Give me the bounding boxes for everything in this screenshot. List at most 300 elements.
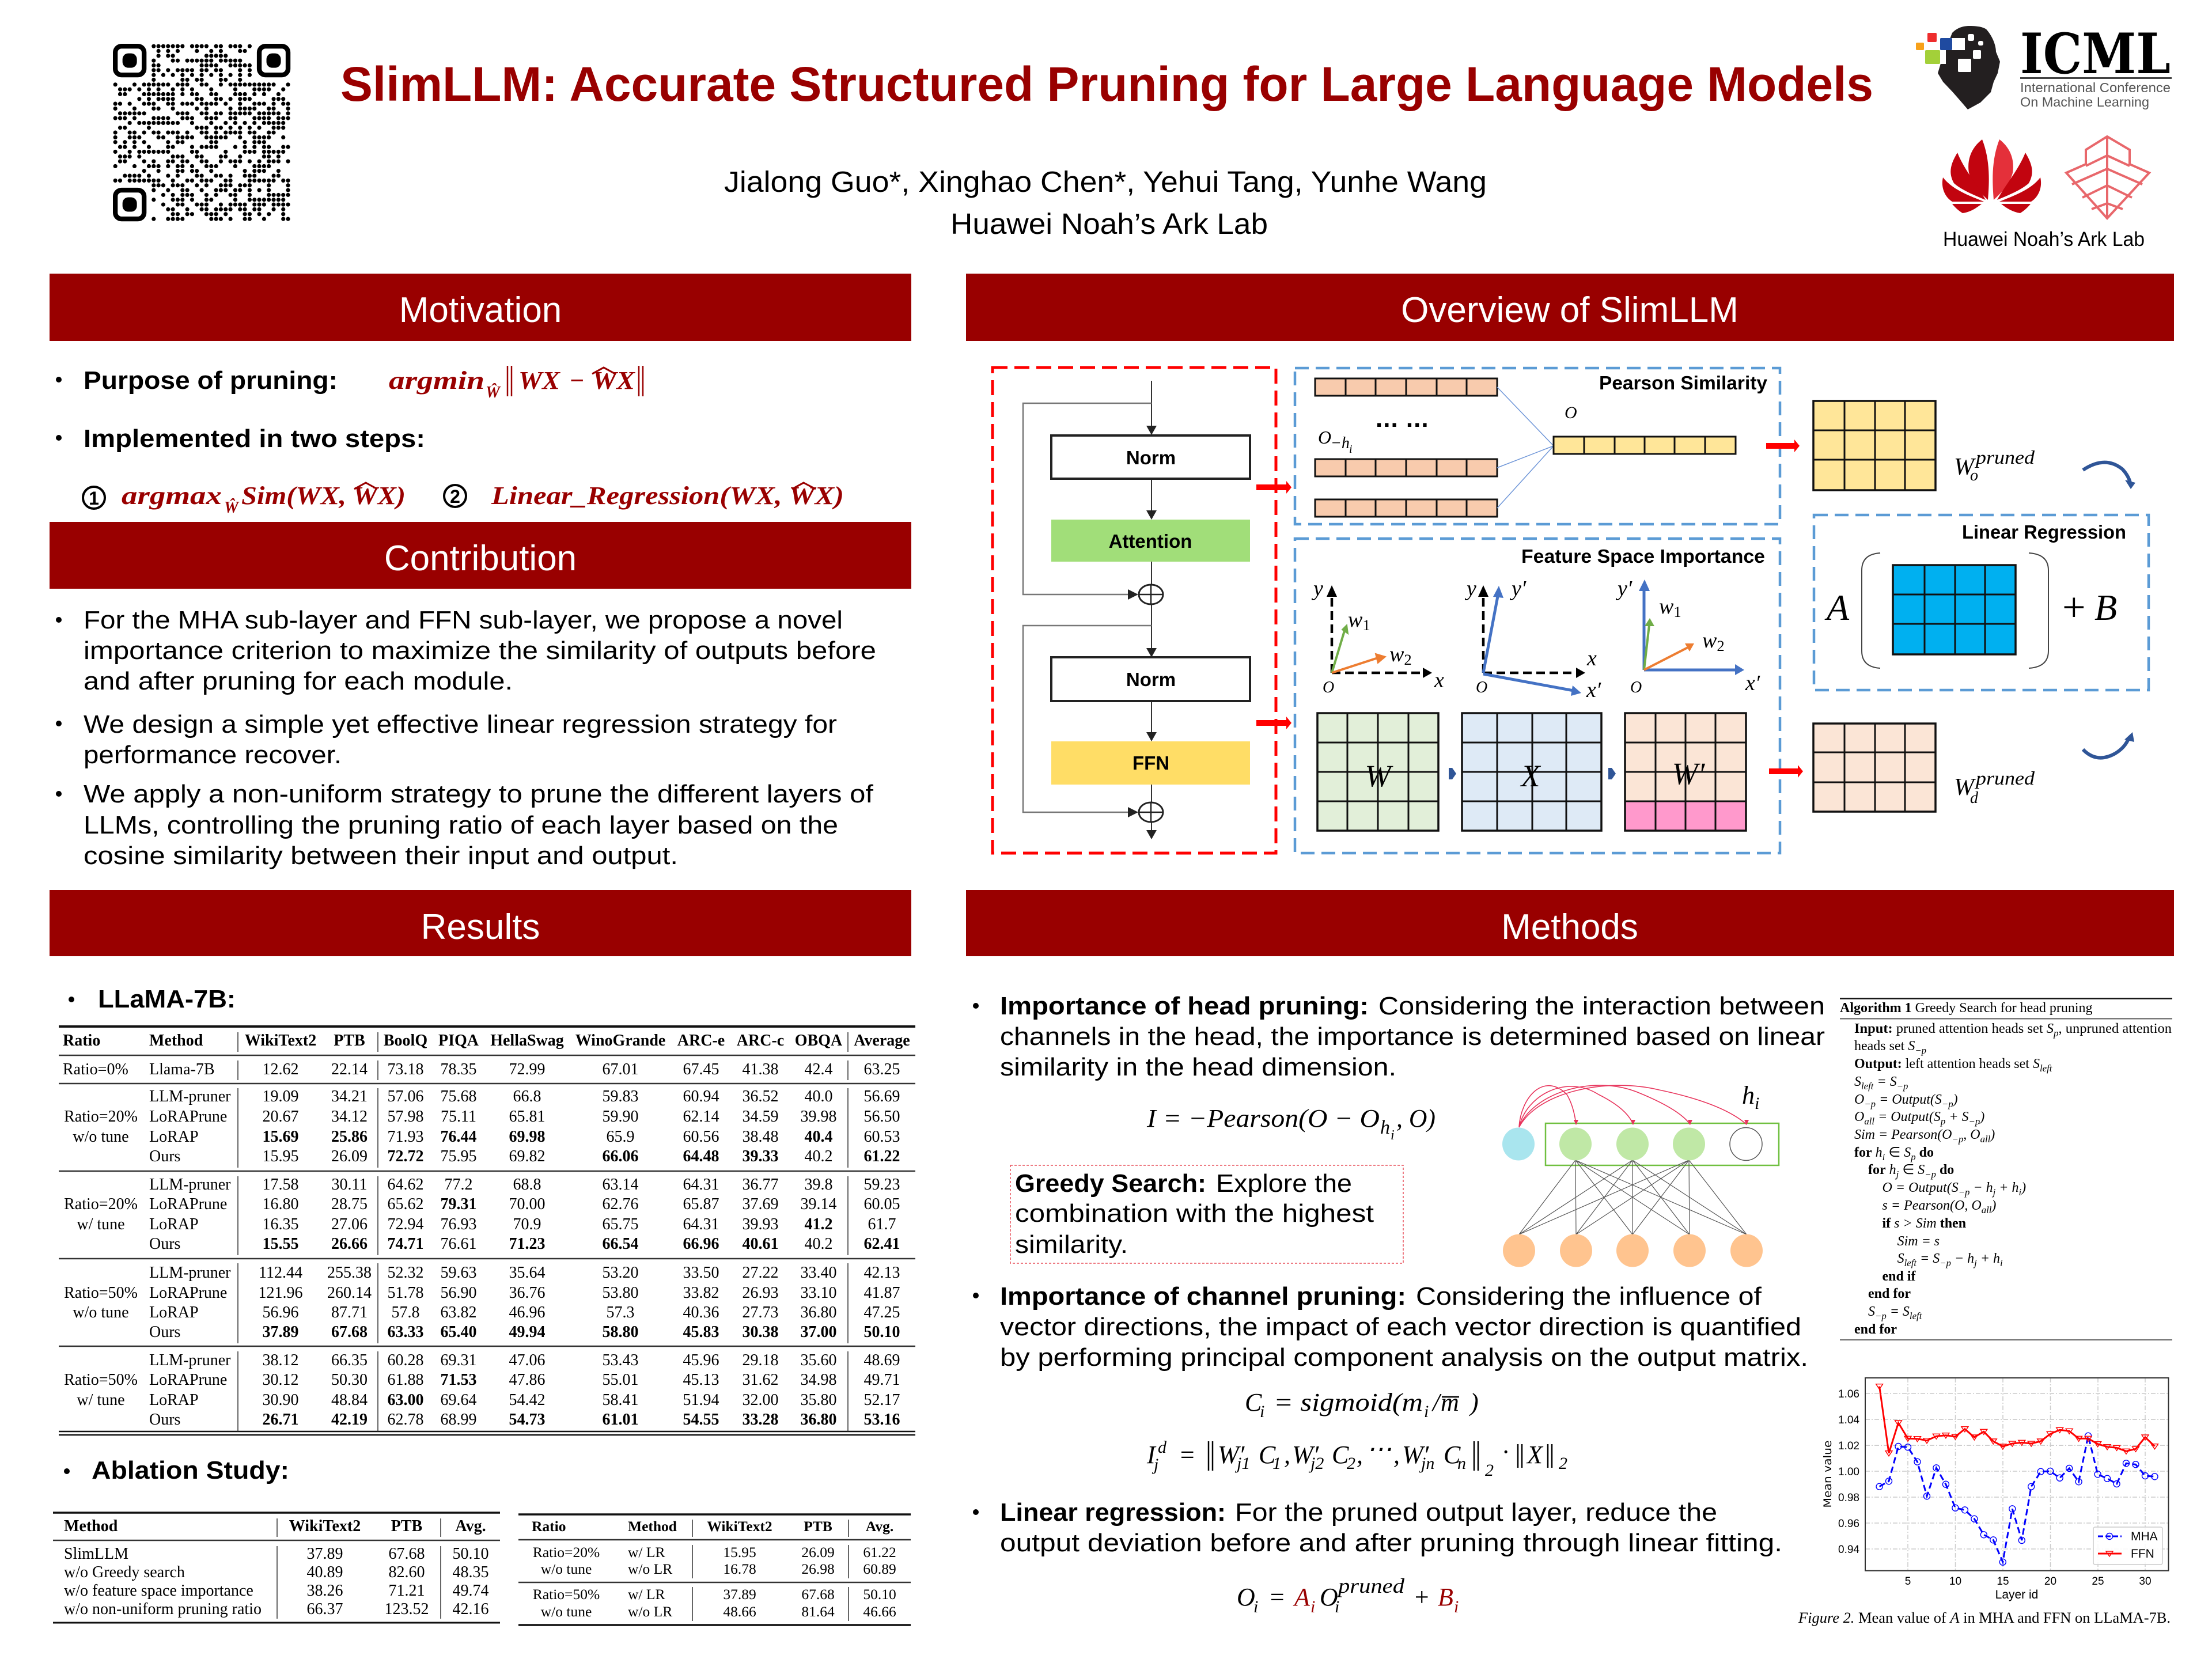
arrow: curved bottom [2083,732,2134,758]
table group: ratio 20 percent with tuning: 66.96 [683,1235,719,1253]
table group: ratio 20 percent without tuning: 59.83 [603,1088,638,1105]
formula: channel importance: d [1158,1438,1167,1457]
table: ablation of linear regression: w/o tune [541,1560,592,1577]
heading: Overview of SlimLLM [966,274,2174,341]
table group: ratio 20 percent with tuning: 27.06 [331,1215,368,1233]
table: ablation by component: w/o non-uniform pruning ratio [64,1600,262,1618]
bullet: non-uniform strategy: cosine similarity between their input and output. [84,842,678,870]
table: ablation by component: WikiText2 [289,1517,361,1535]
formula: pruning objective: argmin [389,366,484,395]
table header row: ARC-e [677,1032,725,1050]
table group: ratio 20 percent without tuning: 57.06 [387,1088,424,1105]
callout: greedy search: Greedy Search: [1015,1169,1206,1198]
algorithm: greedy search: for hj ∈ S−p do [1868,1162,1954,1180]
label: W_d pruned: pruned [1975,768,2035,789]
table: ablation of linear regression: 26.09 [801,1544,835,1560]
logo: Noah's Ark [2066,137,2149,218]
bullet: importance of head pruning [973,992,1825,1081]
panel: Pearson similarity: ... ... [1376,404,1429,433]
formula: channel importance: W′ [1292,1441,1320,1469]
table group: ratio 20 percent without tuning: 34.21 [331,1088,368,1105]
algorithm: greedy search: s = Pearson(O, Oall) [1883,1198,1996,1215]
table group: ratio 20 percent without tuning [64,1088,900,1165]
algorithm: greedy search: S−p = Sleft [1868,1304,1922,1321]
arrow: Pearson similarity to pruned output weights [1766,440,1800,452]
table group: ratio 20 percent with tuning: LLM-pruner [149,1176,231,1194]
formula: C_i sigmoid: / [1431,1388,1442,1416]
table: ablation of linear regression: w/o LR [628,1603,672,1620]
table header row: PTB [334,1032,365,1050]
table group: ratio 20 percent without tuning: 69.98 [509,1128,545,1146]
table: ablation of linear regression: 48.66 [723,1603,756,1620]
table group: ratio 20 percent without tuning: 62.14 [683,1108,719,1126]
algorithm: greedy search: end for [1854,1322,1897,1337]
formula: head importance: i [1391,1128,1395,1143]
diagram: transformer block: Norm [1126,669,1176,690]
x axis ticks: 15 [1997,1575,2009,1588]
table group: ratio 20 percent with tuning: 16.35 [263,1215,298,1233]
diagram: transformer block: FFN [1132,752,1169,774]
x axis ticks: 10 [1949,1575,1961,1588]
step 1 formula: Ŵ [224,498,240,517]
bullet: linear regression strategy: performance recover. [84,741,342,769]
y axis label: Mean value [1821,1440,1834,1508]
heading: Contribution [50,522,911,589]
matrix X: X [1520,759,1541,793]
formula: channel importance: I [1146,1441,1157,1469]
table group: ratio 50 percent without tuning: 112.44 [259,1264,302,1282]
table header row: HellaSwag [490,1032,564,1050]
diagram: head pruning network: h [1742,1081,1755,1109]
y axis ticks: 1.02 [1838,1440,1859,1452]
heading: Methods: Methods [1501,907,1638,947]
formula: C_i sigmoid: ) [1468,1388,1479,1416]
table group: ratio 50 percent with tuning: 54.55 [683,1411,719,1429]
table row: baseline: 63.25 [864,1060,900,1078]
y axis ticks: 1.04 [1838,1414,1859,1426]
formula: head importance: h [1380,1117,1390,1138]
table: ablation of linear regression: 50.10 [863,1586,896,1603]
table: ablation of linear regression: 67.68 [801,1586,835,1603]
table group: ratio 50 percent without tuning: 53.20 [603,1264,638,1282]
table: ablation by component: 50.10 [453,1545,488,1563]
panel: Pearson similarity: O [1565,403,1577,422]
table: ablation by component: Method [64,1517,118,1535]
table: ablation of linear regression: 61.22 [863,1544,896,1560]
table group: ratio 50 percent without tuning: LoRAP [149,1304,199,1321]
axis labels [1311,577,1760,702]
axis labels: y′ [1509,577,1527,601]
table group: ratio 50 percent with tuning: 71.53 [440,1371,477,1389]
panel: linear regression [1814,515,2149,690]
table row: baseline: 12.62 [263,1060,298,1078]
diagram: transformer block [993,368,1276,853]
algorithm: greedy search: Sleft = S−p [1854,1074,1908,1092]
table group: ratio 20 percent with tuning: 70.9 [513,1215,541,1233]
step 1 formula: Sim(WX, WX) [241,482,406,510]
matrix: pruned output weights [1813,401,1936,490]
table group: ratio 20 percent without tuning: 64.48 [683,1147,719,1165]
matrix: pruned dimension weights [1813,724,1936,812]
panel: linear regression: A [1824,587,1850,628]
table group: ratio 50 percent without tuning: 51.78 [387,1284,424,1302]
table group: ratio 20 percent with tuning: 26.66 [331,1235,368,1253]
y axis ticks: 1.06 [1838,1388,1859,1400]
algorithm: greedy search: Sleft = S−p − hj + hi [1897,1251,2003,1268]
table group: ratio 50 percent with tuning: LoRAPrune [149,1371,227,1389]
table group: ratio 20 percent with tuning: 71.23 [509,1235,545,1253]
bullet: importance of head pruning: channels in the head, the importance is determined based on linear [1000,1022,1825,1051]
table group: ratio 20 percent with tuning: 59.23 [864,1176,900,1194]
table header row: Average [854,1032,910,1050]
table group: ratio 20 percent with tuning: LoRAPrune [149,1195,227,1213]
formula: linear fit: i [1310,1597,1315,1616]
table: ablation by component: w/o feature space importance [64,1582,253,1600]
formula: head importance [1146,1104,1435,1143]
table group: ratio 50 percent with tuning: 69.31 [440,1351,477,1369]
table group: ratio 20 percent without tuning: 39.33 [742,1147,779,1165]
axis labels: w2 [1389,642,1412,668]
table header row: OBQA [795,1032,843,1050]
table row: baseline: 67.45 [683,1060,719,1078]
table group: ratio 50 percent with tuning: 69.64 [440,1391,477,1409]
table group: ratio 20 percent with tuning: Ours [149,1235,180,1253]
authors and affiliation [724,165,1487,240]
diagram: head pruning network [1502,1081,1779,1267]
table group: ratio 50 percent with tuning: 36.80 [801,1411,836,1429]
formula: channel importance: · [1502,1438,1509,1466]
bullet: importance criterion [56,606,876,695]
label: W_d pruned [1954,768,2035,807]
formula: channel importance [1146,1435,1567,1480]
bullet: importance of channel pruning: vector directions, the impact of each vector direction is quantified [1000,1313,1801,1341]
table group: ratio 50 percent without tuning: 260.14 [327,1284,372,1302]
bullet: importance of channel pruning [973,1282,1808,1372]
logo caption: Huawei Noah’s Ark Lab [1943,228,2145,251]
logo: Huawei [1942,139,2041,213]
table group: ratio 50 percent without tuning: 49.94 [509,1323,545,1341]
table group: ratio 20 percent with tuning: 40.61 [742,1235,779,1253]
table: ablation of linear regression: 46.66 [863,1603,896,1620]
table group: ratio 20 percent with tuning: 37.69 [742,1195,779,1213]
formula: C_i sigmoid: = sigmoid(m [1274,1388,1423,1416]
table: ablation of linear regression: 26.98 [801,1560,835,1577]
formula: channel importance: , [1393,1441,1400,1469]
subheading: Ablation Study: Ablation Study: [92,1456,289,1484]
panel: contribution [50,522,911,870]
table group: ratio 20 percent with tuning: 70.00 [509,1195,545,1213]
table row: baseline: Llama-7B [149,1060,215,1078]
table: ablation by component: 48.35 [453,1563,488,1581]
formula: channel importance: jn [1419,1454,1434,1473]
table row: baseline: 22.14 [331,1060,368,1078]
table group: ratio 20 percent with tuning: 65.75 [603,1215,638,1233]
table group: ratio 20 percent with tuning: 79.31 [440,1195,477,1213]
callout: greedy search: similarity. [1015,1230,1128,1259]
table group: ratio 50 percent with tuning: Ratio=50% [64,1371,138,1389]
formula: C_i sigmoid: C [1245,1388,1262,1416]
formula: linear fit: pruned [1336,1574,1405,1597]
table row: baseline: 73.18 [387,1060,424,1078]
table group: ratio 20 percent with tuning: 68.8 [513,1176,541,1194]
table: ablation of linear regression: Ratio [532,1518,566,1535]
matrix W: W [1365,759,1394,793]
table: ablation by component: 38.26 [306,1582,343,1600]
table: ablation of linear regression: 81.64 [801,1603,835,1620]
table group: ratio 50 percent with tuning: 68.99 [440,1411,477,1429]
table group: ratio 20 percent with tuning: 28.75 [331,1195,368,1213]
arrow: transformer to feature space importance [1256,717,1291,729]
matrix W prime [1625,713,1746,831]
formula: linear fit: A [1293,1583,1310,1611]
table group: ratio 50 percent without tuning: Ours [149,1323,180,1341]
bullet: non-uniform strategy: We apply a non-uniform strategy to prune the different layers of [84,780,874,808]
bullet: importance of head pruning: Considering the interaction between [1378,992,1825,1020]
panel: methods [966,890,2174,1626]
arrow: W to X [1449,768,1456,779]
table group: ratio 20 percent without tuning: 40.0 [804,1088,833,1105]
table: ablation of linear regression: w/o LR [628,1560,672,1577]
label: W_o pruned: W [1954,454,1976,480]
table group: ratio 50 percent without tuning: 37.89 [263,1323,298,1341]
x axis ticks: 20 [2044,1575,2056,1588]
table group: ratio 20 percent without tuning: LLM-pruner [149,1088,231,1105]
table group: ratio 20 percent with tuning: 15.55 [263,1235,298,1253]
table group: ratio 50 percent with tuning: 66.35 [331,1351,368,1369]
formula: channel importance: n [1457,1454,1466,1473]
panel: Pearson similarity: −h [1331,434,1350,452]
table group: ratio 50 percent without tuning: 33.40 [801,1264,836,1282]
table group: ratio 20 percent with tuning [64,1176,900,1253]
formula: channel importance: W′ [1218,1441,1245,1469]
table group: ratio 50 percent with tuning: 61.88 [387,1371,424,1389]
formula: channel importance: j2 [1308,1454,1324,1473]
arrow: curved top [2083,463,2135,489]
y axis ticks: 0.94 [1838,1544,1859,1556]
table group: ratio 50 percent without tuning: 27.73 [742,1304,779,1321]
table group: ratio 50 percent without tuning: 58.80 [603,1323,638,1341]
bullet: non-uniform strategy: LLMs, controlling the pruning ratio of each layer based on the [84,811,838,839]
algorithm: greedy search: O = Output(S−p − hj + hi) [1883,1180,2026,1198]
table group: ratio 20 percent with tuning: 60.05 [864,1195,900,1213]
table: ablation of linear regression: Ratio=20% [533,1544,600,1560]
table group: ratio 50 percent without tuning: 65.40 [440,1323,477,1341]
logo: ICML: ICML [2020,21,2171,86]
table group: ratio 20 percent without tuning: 19.09 [263,1088,298,1105]
table: ablation by component: 40.89 [306,1563,343,1581]
table: ablation of linear regression: w/ LR [628,1586,665,1603]
table group: ratio 20 percent without tuning: 66.8 [513,1088,541,1105]
table: ablation of linear regression: w/o tune [541,1603,592,1620]
table group: ratio 20 percent with tuning: 76.93 [440,1215,477,1233]
table: ablation of linear regression: 37.89 [723,1586,756,1603]
bullet: implemented in two steps: Implemented in two steps: [84,425,425,453]
table group: ratio 20 percent with tuning: Ratio=20% [64,1195,138,1213]
table: ablation of linear regression: Avg. [866,1518,893,1535]
table group: ratio 20 percent with tuning: 64.62 [387,1176,424,1194]
bullet: importance of channel pruning: Importance of channel pruning: [1000,1282,1406,1310]
formula: linear fit: O [1320,1583,1338,1611]
table group: ratio 50 percent without tuning: 67.68 [331,1323,368,1341]
axis labels: y [1311,577,1323,601]
table: ablation by component: 71.21 [388,1582,425,1600]
series: MHA [1880,1436,2154,1562]
axis labels: w1 [1659,594,1681,620]
table group: ratio 50 percent with tuning: 35.60 [801,1351,836,1369]
formula: channel importance: ⋯ [1366,1435,1392,1463]
table row: baseline: 41.38 [742,1060,779,1078]
formula: C_i sigmoid: i [1260,1402,1264,1421]
table group: ratio 20 percent without tuning: 66.06 [603,1147,638,1165]
bullet: importance criterion: and after pruning for each module. [84,667,513,695]
table group: ratio 20 percent without tuning: 65.81 [509,1108,545,1126]
formula: linear fit: = [1268,1583,1286,1611]
table group: ratio 50 percent with tuning: 34.98 [801,1371,836,1389]
table group: ratio 50 percent with tuning: 45.96 [683,1351,719,1369]
panel: Pearson similarity: O [1318,427,1331,448]
panel: overview [966,274,2174,853]
algorithm: greedy search: for hi ∈ Sp do [1854,1145,1934,1162]
panel: Pearson similarity: Pearson Similarity [1599,372,1768,393]
table: ablation by component: PTB [391,1517,422,1535]
step 1 formula: argmax [122,482,222,510]
table group: ratio 50 percent without tuning: 30.38 [742,1323,779,1341]
table group: ratio 20 percent without tuning: 75.68 [440,1088,477,1105]
formula: channel importance: j1 [1234,1454,1250,1473]
table group: ratio 20 percent without tuning: 60.56 [683,1128,719,1146]
table group: ratio 20 percent without tuning: Ours [149,1147,180,1165]
table group: ratio 20 percent with tuning: LoRAP [149,1215,199,1233]
table group: ratio 20 percent without tuning: w/o tune [73,1128,129,1146]
table group: ratio 50 percent with tuning: 33.28 [742,1411,779,1429]
table group: ratio 20 percent without tuning: 72.72 [387,1147,424,1165]
table group: ratio 50 percent with tuning: Ours [149,1411,180,1429]
title: SlimLLM: Accurate Structured Pruning for Large Language Models [340,57,1873,111]
chart: rotated axes [1478,585,1585,696]
axis labels: x [1586,646,1597,671]
table group: ratio 50 percent without tuning: 57.3 [606,1304,635,1321]
algorithm: greedy search: Oall = Output(Sp + S−p) [1854,1109,1984,1127]
table group: ratio 20 percent with tuning: 64.31 [683,1215,719,1233]
table header row: Ratio [63,1032,100,1050]
heading: Results: Results [421,907,540,947]
formula: channel importance: C [1444,1441,1461,1469]
axis labels: O [1476,679,1487,696]
x axis ticks [1905,1575,2152,1588]
table group: ratio 20 percent without tuning: 60.94 [683,1088,719,1105]
table row: baseline: Ratio=0% [63,1060,128,1078]
table group: ratio 20 percent with tuning: 63.14 [603,1176,638,1194]
formula: channel importance: C [1332,1441,1349,1469]
table group: ratio 50 percent without tuning: 255.38 [327,1264,372,1282]
table group: ratio 50 percent without tuning: 33.10 [801,1284,836,1302]
table: ablation by component: 66.37 [306,1600,343,1618]
formula: channel importance: C [1259,1441,1276,1469]
table: ablation of linear regression: WikiText2 [707,1518,772,1535]
table group: ratio 20 percent with tuning: 16.80 [263,1195,298,1213]
label: W_d pruned: W [1954,774,1976,801]
table group: ratio 20 percent without tuning: 15.95 [263,1147,298,1165]
table group: ratio 20 percent without tuning: 20.67 [263,1108,298,1126]
table group: ratio 20 percent with tuning: 64.31 [683,1176,719,1194]
formula: linear fit: i [1454,1597,1459,1616]
table: ablation by component: 82.60 [388,1563,425,1581]
table group: ratio 50 percent with tuning: 52.17 [864,1391,900,1409]
table group: ratio 20 percent with tuning: 65.87 [683,1195,719,1213]
formula: pruning objective: − [569,366,585,395]
axis labels: y [1464,577,1476,601]
table group: ratio 20 percent without tuning: 69.82 [509,1147,545,1165]
bullet: importance criterion: For the MHA sub-layer and FFN sub-layer, we propose a novel [84,606,843,634]
table group: ratio 50 percent without tuning: 57.8 [392,1304,419,1321]
arrow: X to W prime [1608,768,1616,779]
table group: ratio 50 percent with tuning: 30.90 [263,1391,298,1409]
table group: ratio 20 percent with tuning: 66.54 [603,1235,638,1253]
axis labels: w1 [1348,608,1370,634]
table group: ratio 50 percent without tuning: 33.82 [683,1284,719,1302]
table group: ratio 20 percent with tuning: 65.62 [387,1195,424,1213]
bullet: linear regression strategy: We design a simple yet effective linear regression strategy for [84,710,837,738]
step 2 formula: 2 [450,486,460,507]
formula: linear fit [1237,1574,1459,1616]
table: ablation by component: 42.16 [453,1600,488,1618]
table header row: BoolQ [384,1032,427,1050]
table: ablation of linear regression [518,1514,911,1625]
table group: ratio 20 percent without tuning: 40.2 [804,1147,833,1165]
heading: Motivation: Motivation [399,290,562,330]
algorithm: greedy search: Sim = s [1897,1234,1940,1249]
matrix W [1317,713,1438,831]
formula: linear fit: i [1253,1597,1258,1616]
algorithm: greedy search: O−p = Output(S−p) [1854,1092,1958,1109]
step 1 formula: 1 [89,488,99,509]
table group: ratio 50 percent without tuning: 87.71 [331,1304,368,1321]
algorithm: greedy search: Input: pruned attention heads set Sp, unpruned attention [1854,1021,2172,1039]
table group: ratio 50 percent without tuning: 36.80 [801,1304,836,1321]
table group: ratio 50 percent without tuning: 46.96 [509,1304,545,1321]
table group: ratio 50 percent without tuning: 56.96 [263,1304,298,1321]
formula: head importance: , O) [1396,1104,1435,1132]
table row: baseline: 78.35 [440,1060,477,1078]
heading: Methods [966,890,2174,956]
callout: greedy search: combination with the highest [1015,1199,1374,1228]
table group: ratio 50 percent without tuning: 36.76 [509,1284,545,1302]
bullet: importance of head pruning: Importance of head pruning: [1000,992,1369,1020]
table: ablation by component [53,1513,500,1623]
panel: feature space importance: Feature Space Importance [1521,546,1765,567]
table group: ratio 20 percent without tuning: LoRAPrune [149,1108,227,1126]
formula: channel importance: W′ [1402,1441,1430,1469]
table group: ratio 50 percent with tuning: 32.00 [742,1391,779,1409]
table group: ratio 20 percent without tuning: 60.53 [864,1128,900,1146]
table group: ratio 20 percent with tuning: 36.77 [742,1176,779,1194]
heading: Contribution: Contribution [384,539,577,578]
bullet: purpose of pruning: Purpose of pruning: [84,366,338,395]
table group: ratio 50 percent with tuning: 53.16 [864,1411,900,1429]
chart caption: Figure 2. Mean value of A in MHA and FFN on LLaMA-7B. [1798,1609,2171,1626]
table group: ratio 20 percent without tuning: 38.48 [742,1128,779,1146]
table header row: WinoGrande [575,1032,665,1050]
table group: ratio 20 percent without tuning: 36.52 [742,1088,779,1105]
panel: results [50,890,915,1625]
bullet: importance of head pruning: similarity in the head dimension. [1000,1053,1396,1081]
algorithm: greedy search: heads set S−p [1854,1039,1926,1056]
axis labels: x′ [1586,678,1601,702]
table group: ratio 20 percent with tuning: 40.2 [804,1235,833,1253]
table group: ratio 20 percent with tuning: 74.71 [387,1235,424,1253]
bullet: non-uniform strategy [56,780,874,870]
axis labels: x [1434,668,1444,692]
